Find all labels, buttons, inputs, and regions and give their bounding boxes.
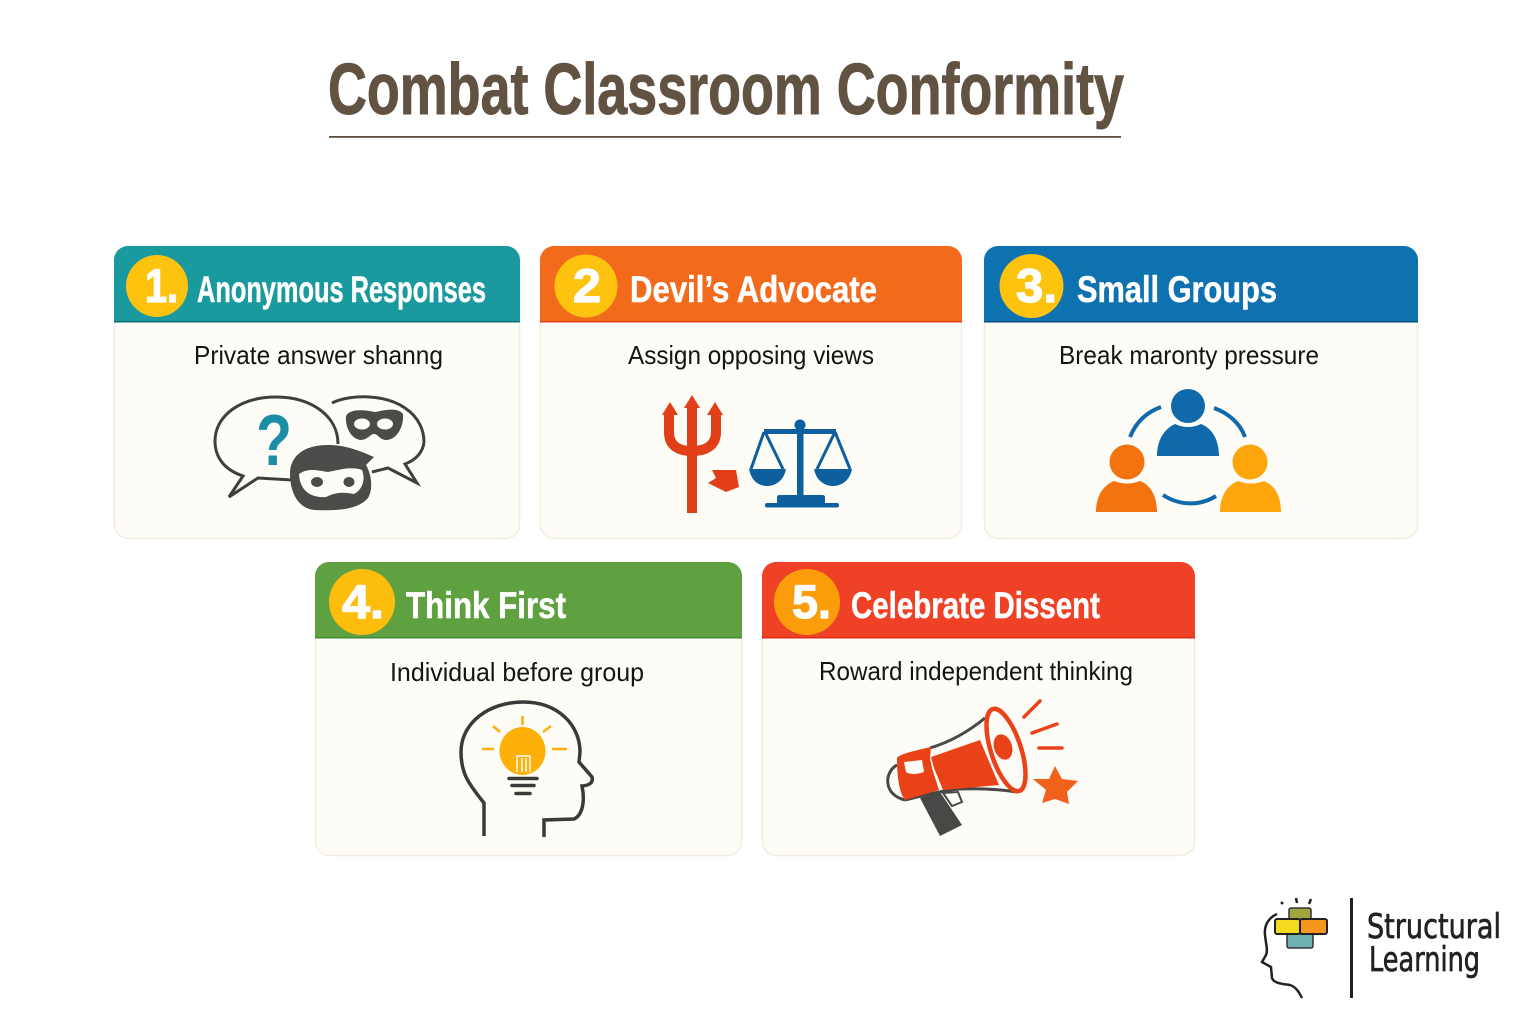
header: think first (315, 562, 742, 638)
icon: anonymous speech bubbles: ? (256, 401, 292, 481)
icon: anonymous speech bubbles (215, 397, 424, 510)
header: anonymous responses: 1. (145, 259, 178, 312)
panel: small groups (984, 246, 1418, 538)
header: think first: 4. (342, 575, 384, 628)
header: devil's advocate: Devil’s Advocate (630, 269, 877, 310)
header: devil's advocate (540, 246, 962, 322)
text: description: Break maronty pressure (1059, 340, 1319, 370)
header: small groups (984, 246, 1418, 322)
panel: devil's advocate (540, 246, 962, 538)
header: devil's advocate: 2 (573, 259, 601, 312)
logo: Structural Learning: Learning (1369, 940, 1480, 980)
header: anonymous responses: Anonymous Responses (197, 269, 486, 310)
text: description: Individual before group (390, 657, 644, 687)
header: anonymous responses (114, 246, 520, 322)
icon: balance scales (749, 420, 852, 508)
header: celebrate dissent (762, 562, 1195, 638)
logo: Structural Learning: Structural (1367, 907, 1501, 947)
text: description: Assign opposing views (628, 340, 874, 370)
panel: anonymous responses (114, 246, 520, 538)
header: celebrate dissent: 5. (792, 575, 831, 628)
panel: think first (315, 562, 742, 856)
icon: group of three people (1096, 389, 1281, 512)
text: description: Roward independent thinking (819, 656, 1133, 686)
header: celebrate dissent: Celebrate Dissent (851, 585, 1100, 626)
icon: megaphone with star (888, 701, 1078, 836)
logo: Structural Learning (1262, 898, 1501, 998)
icon: head with blocks (1262, 898, 1327, 998)
icon: trident (662, 395, 739, 513)
title: Combat Classroom Conformity (328, 50, 1124, 130)
text: description: Private answer shanng (194, 340, 443, 370)
header: think first: Think First (406, 585, 566, 626)
icon: head with light bulb (461, 702, 592, 837)
panel: celebrate dissent (762, 562, 1195, 856)
header: small groups: Small Groups (1077, 269, 1277, 310)
header: small groups: 3. (1016, 259, 1057, 312)
